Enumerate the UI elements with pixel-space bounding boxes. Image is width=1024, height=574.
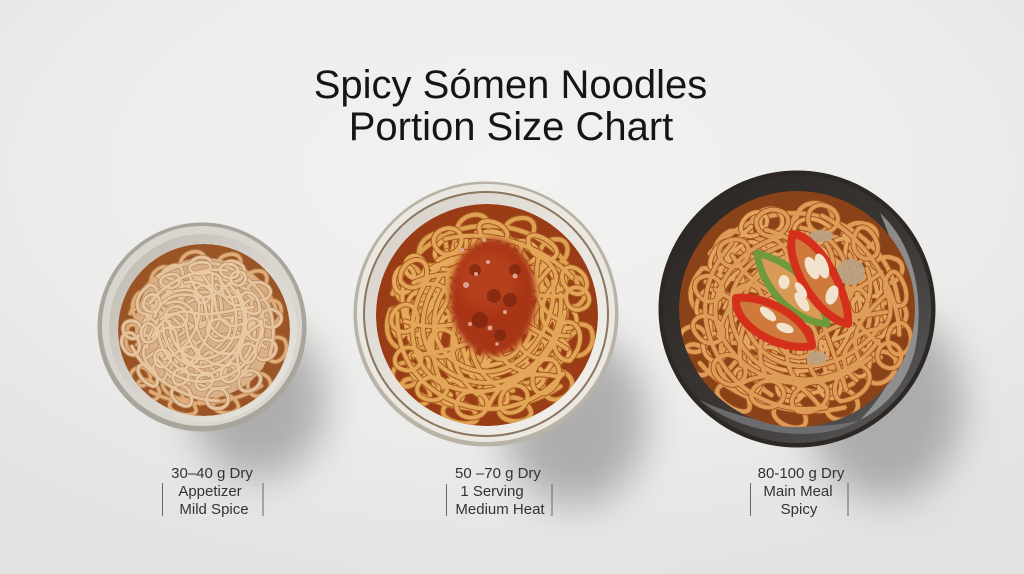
red chili slice, upper [791,234,848,324]
noodles: spicy glazed [679,191,915,427]
bowl: small [98,222,306,432]
green chili slice [757,253,827,324]
panel: medium portion [354,182,647,518]
almond slivers [757,252,841,335]
red chili slice, lower [736,298,812,347]
label: small portion: Appetizer [178,483,242,500]
label: small portion: Mild Spice [179,501,249,518]
bowl shadow: large [807,310,963,500]
chili sauce mound [450,238,536,355]
panel: large portion [657,169,963,518]
sesame clumps [807,230,865,365]
noodles: orange with chili sauce [376,204,598,426]
title [314,63,707,149]
label: medium portion [446,465,552,518]
label: large portion [750,465,848,518]
title: Spicy Sómen Noodles [314,63,707,107]
bowl: medium [354,182,618,446]
bowl shadow: medium [503,334,647,506]
title: Portion Size Chart [349,105,673,149]
bowl: large [658,170,936,448]
label: large portion: 80-100 g Dry [758,465,845,482]
label: medium portion: 1 Serving [460,483,524,500]
noodles: pale nest with sauce [118,244,290,416]
label: medium portion: Medium Heat [455,501,545,518]
label: small portion [162,465,263,518]
bowl shadow: small [190,322,326,478]
label: small portion: 30–40 g Dry [171,465,253,482]
label: large portion: Spicy [781,501,818,518]
label: large portion: Main Meal [763,483,833,500]
label: medium portion: 50 –70 g Dry [455,465,541,482]
panel: small portion [98,222,326,518]
